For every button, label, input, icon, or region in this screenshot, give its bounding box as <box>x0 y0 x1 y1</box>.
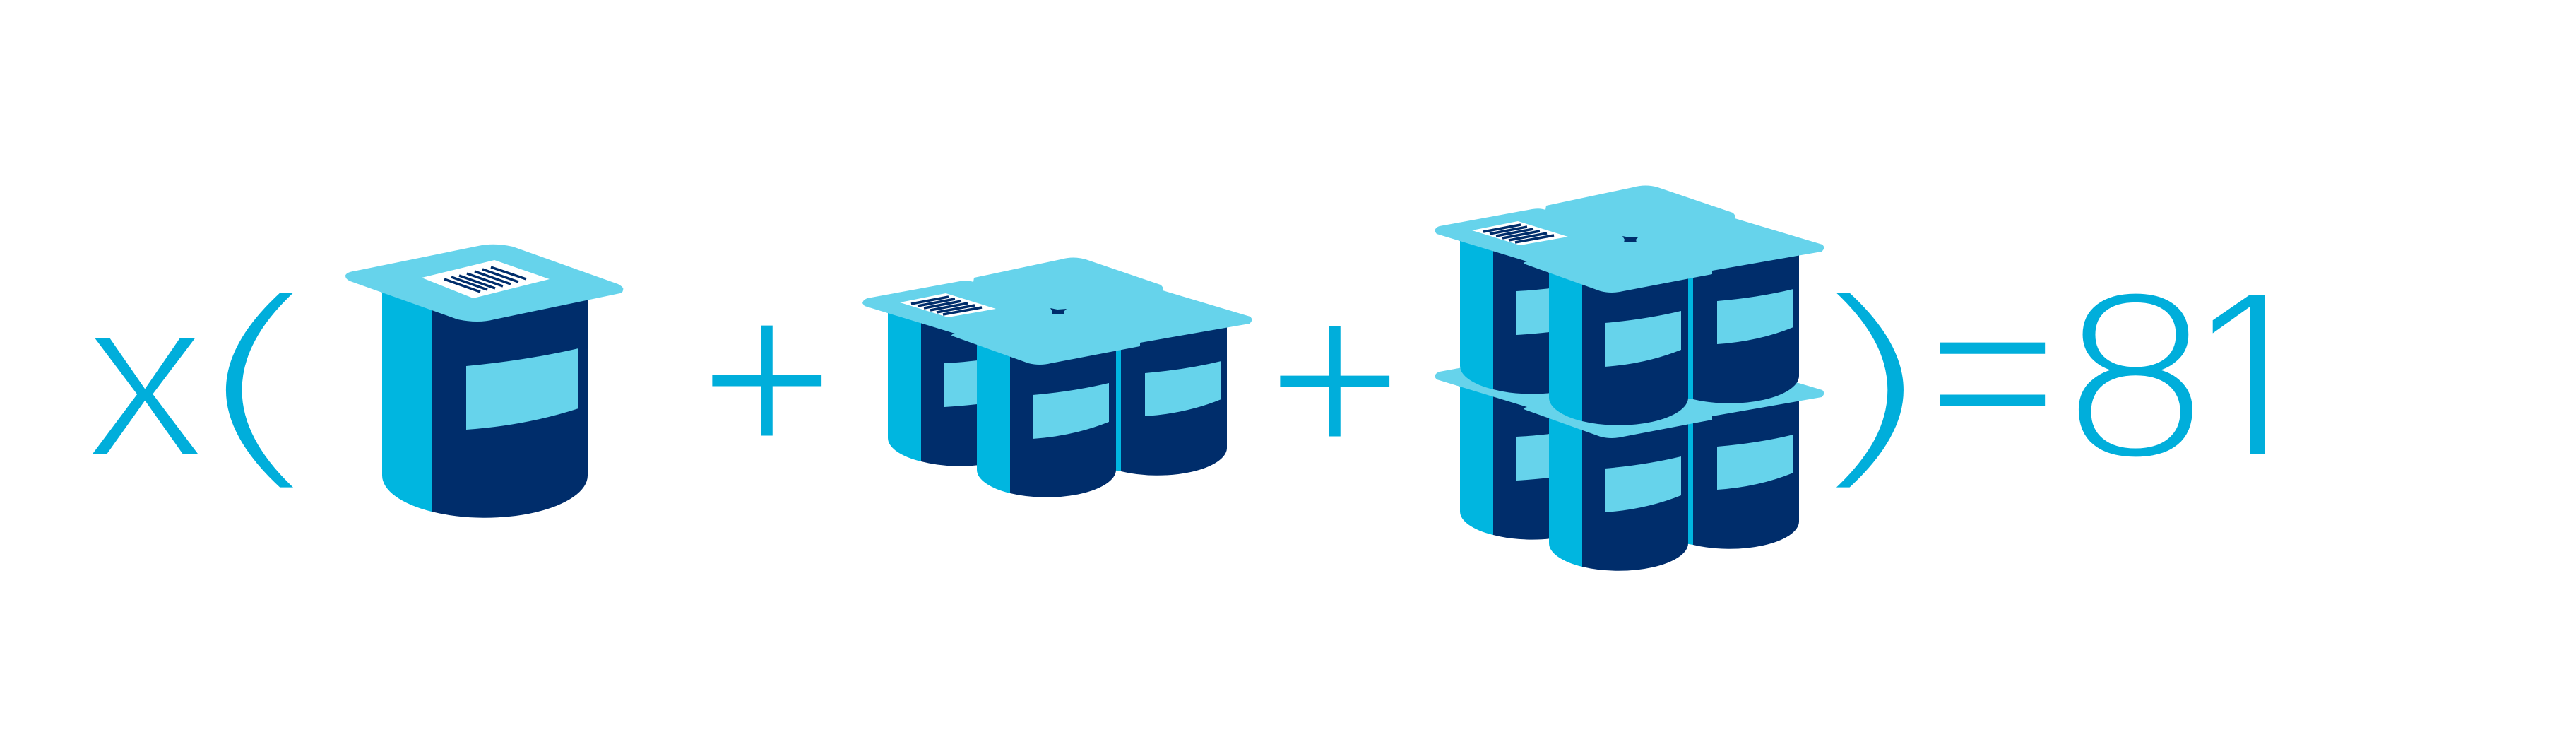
closing bracket: ) <box>1788 255 1947 512</box>
upper layer of four pots <box>1435 185 1824 425</box>
equals sign: = <box>1927 254 2058 488</box>
plus sign: + <box>698 245 836 509</box>
icon: pack of eight pots, two layers <box>1435 185 1824 571</box>
result 81 <box>2078 294 2265 456</box>
plus sign: + <box>1266 246 1404 510</box>
opening bracket: ( <box>179 255 338 512</box>
result 81: 8 <box>2055 254 2216 505</box>
lower layer of four pots <box>1435 331 1824 571</box>
icon: pack of four pots <box>862 257 1252 497</box>
icon: single yogurt pot <box>345 245 623 518</box>
multiplication sign x: x <box>83 248 208 507</box>
equation infographic <box>93 185 2265 571</box>
result 81: 1 <box>2187 240 2320 509</box>
